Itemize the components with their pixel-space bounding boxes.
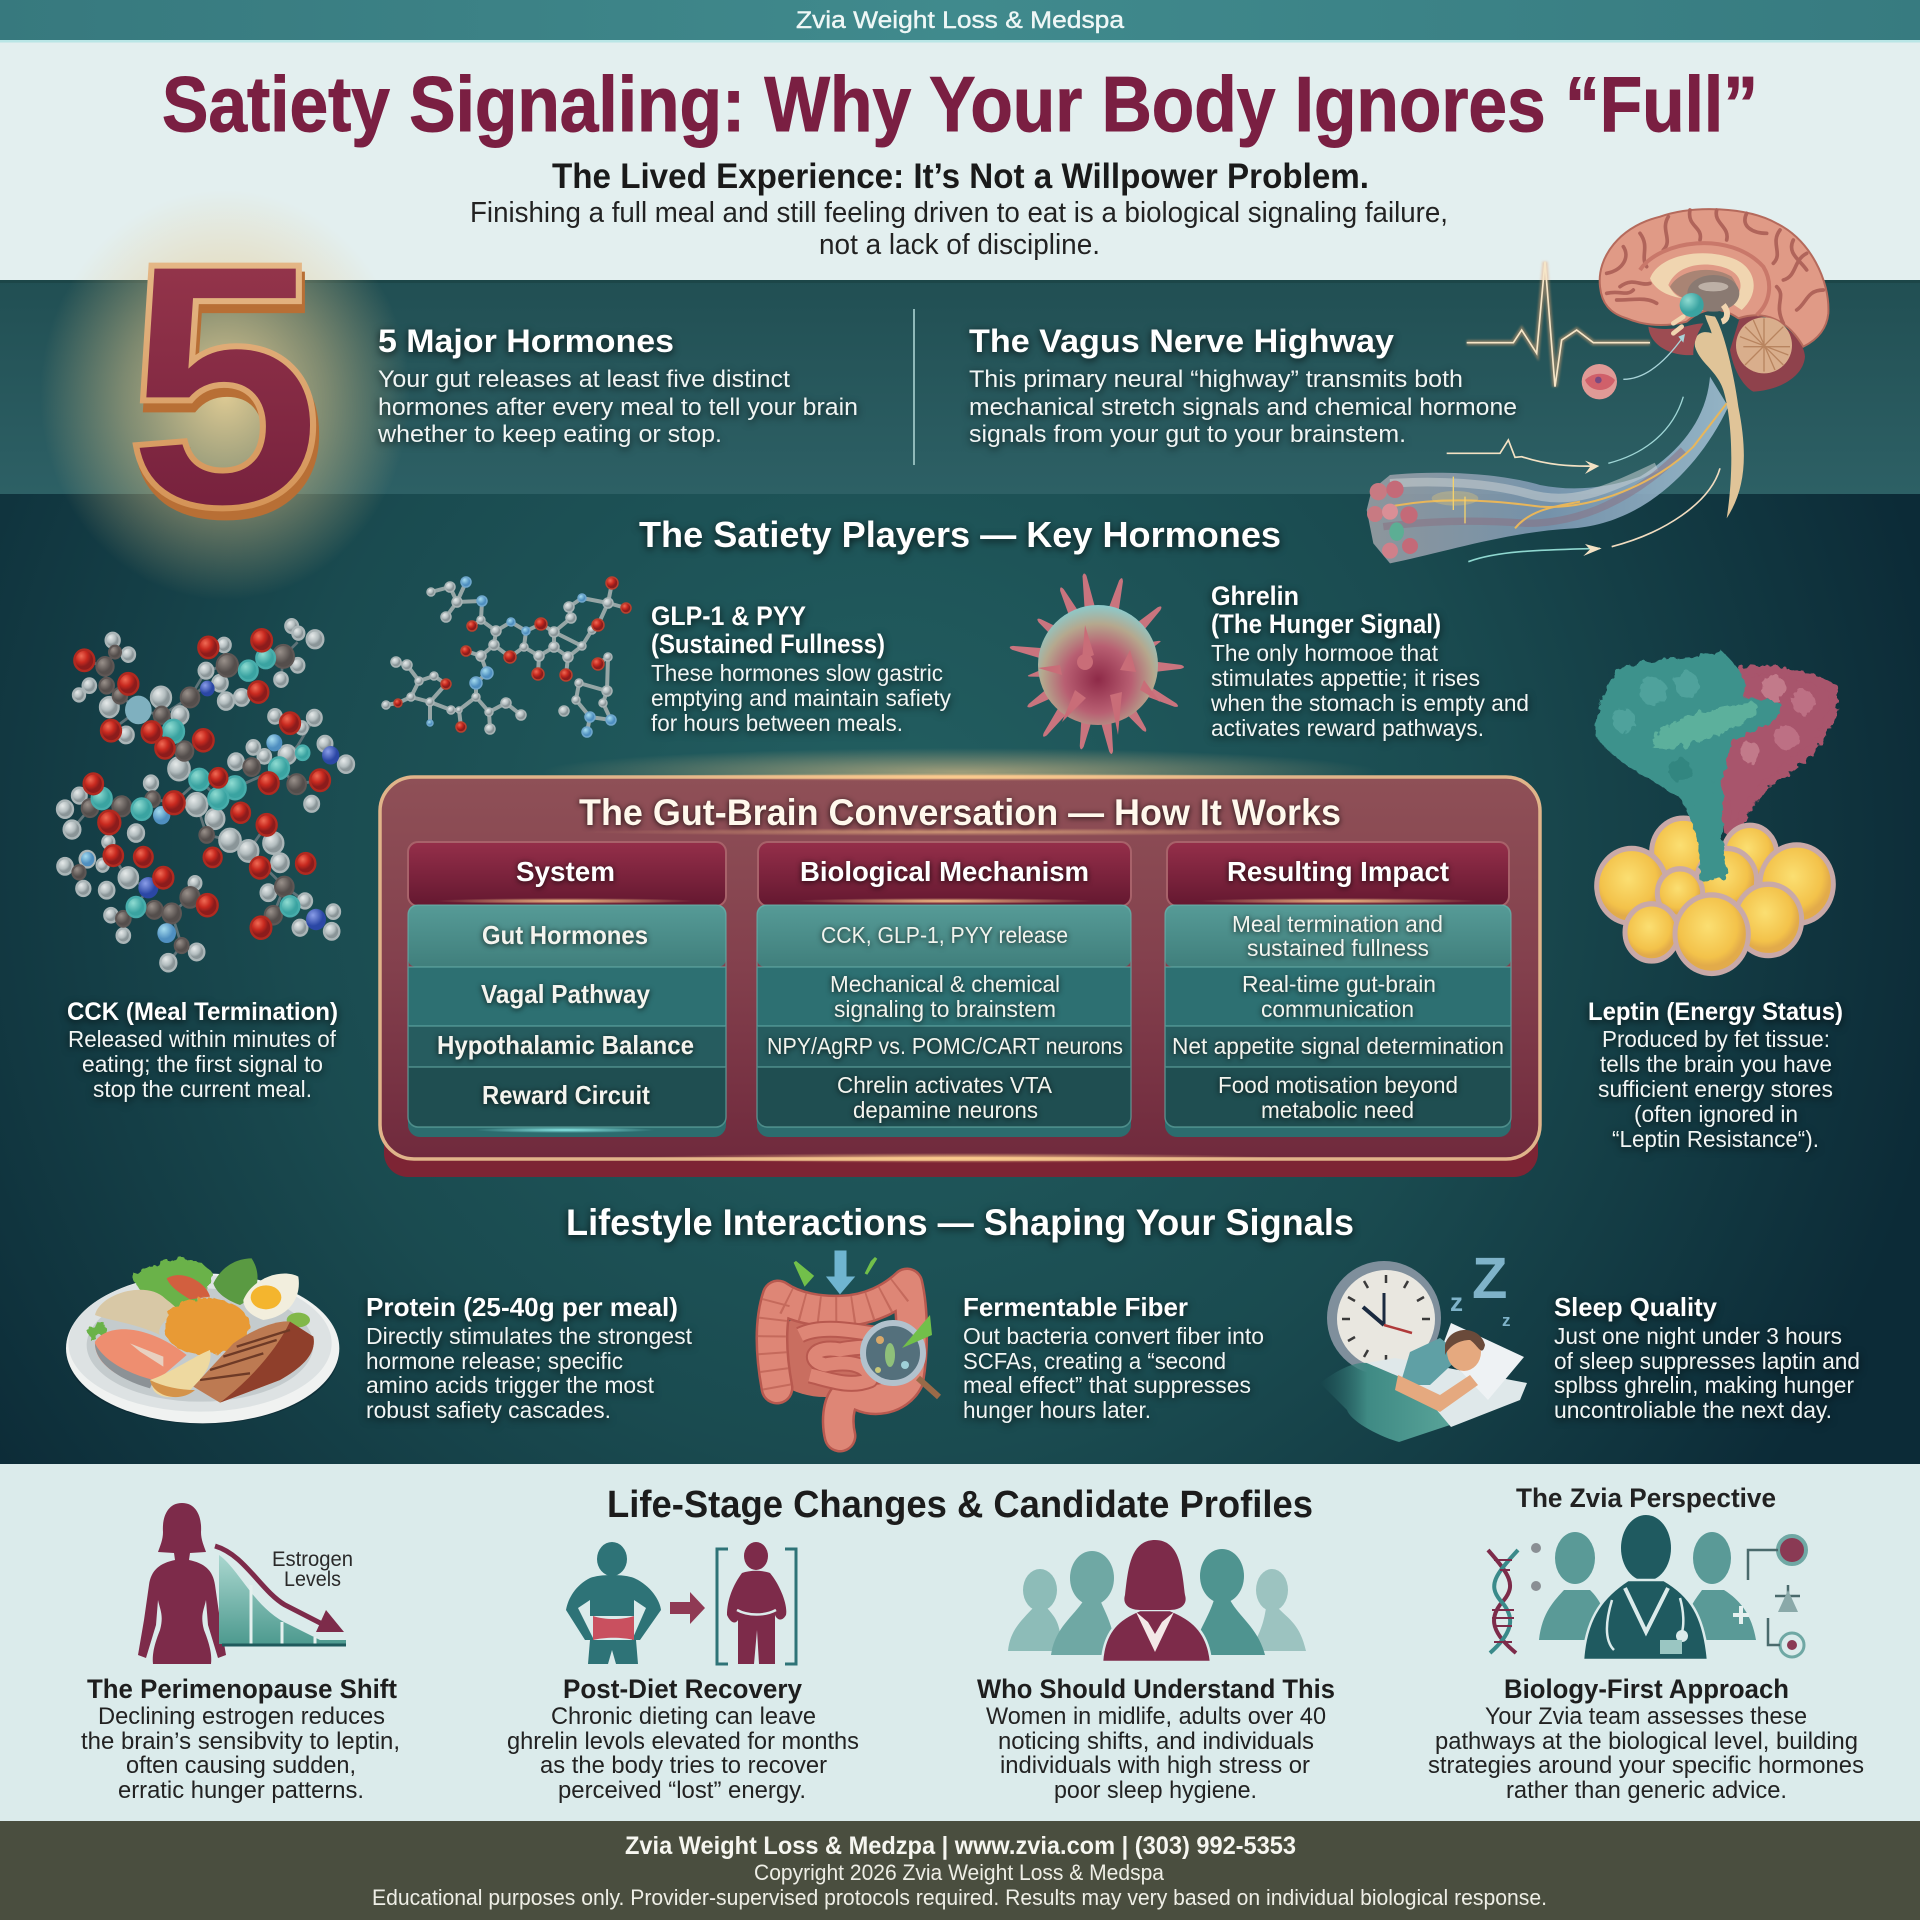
text: CCK (67, 998, 338, 1102)
pink protein lobe (1720, 670, 1834, 831)
table column: resulting impact: Meal termination and (1232, 911, 1443, 937)
text: who should understand this: individuals with high stress or (1000, 1752, 1310, 1779)
subtitle block: not a lack of discipline. (819, 229, 1100, 261)
text: leptin: tells the brain you have (1600, 1051, 1832, 1077)
text: GLP-1 and PYY: for hours between meals. (651, 710, 903, 736)
inner brain (1650, 253, 1754, 310)
text: leptin: Produced by fet tissue: (1602, 1026, 1830, 1052)
table column: biological mechanism: Chrelin activates VTA (837, 1072, 1052, 1098)
pasta roll (150, 1350, 211, 1397)
heading: the satiety players: The Satiety Players — Key Hormones (639, 514, 1281, 555)
table column: system: Gut Hormones (482, 920, 648, 950)
cerebellum back (1730, 316, 1805, 392)
illustration: perimenopause figure and estrogen chart: Estrogen (272, 1548, 353, 1571)
text: CCK: CCK (Meal Termination) (67, 998, 338, 1026)
stat: vagus nerve highway: mechanical stretch signals and chemical hormone (969, 394, 1517, 421)
table column: biological mechanism: CCK, GLP-1, PYY release (821, 922, 1068, 948)
table column: biological mechanism (757, 842, 1131, 1137)
text: perimenopause shift: Declining estrogen reduces (98, 1703, 385, 1730)
illustration: GLP-1 molecule (382, 577, 631, 737)
text: Ghrelin: stimulates appettie; it rises (1211, 665, 1480, 691)
text: sleep quality (1554, 1292, 1860, 1423)
text: leptin: sufficient energy stores (1598, 1076, 1833, 1102)
illustration: protein plate (66, 1258, 339, 1424)
text: perimenopause shift: The Perimenopause Shift (87, 1674, 397, 1704)
illustration: perimenopause figure and estrogen chart (138, 1503, 353, 1664)
teal protein lobe (1600, 656, 1777, 877)
text: who should understand this: Women in midlife, adults over 40 (986, 1703, 1326, 1730)
illustration: group of silhouettes (1008, 1540, 1306, 1662)
illustration: ghrelin virus-like particle (1009, 573, 1184, 755)
illustration: post-diet recovery figures (566, 1542, 796, 1664)
text: perimenopause shift: often causing sudden, (126, 1752, 356, 1779)
illustration: clock and sleeping person (1320, 1246, 1527, 1442)
table column: system: Vagal Pathway (481, 979, 650, 1009)
footer: Educational purposes only. Provider-supervised protocols required. Results may very based on individual biological response. (372, 1885, 1547, 1910)
stat: 5 major hormones: 5 Major Hormones (378, 323, 674, 359)
text: leptin: (often ignored in (1634, 1101, 1798, 1127)
text: protein: hormone release; specific (366, 1348, 623, 1374)
heading: the zvia perspective: The Zvia Perspective (1516, 1483, 1776, 1513)
text: sleep quality: of sleep suppresses laptin and (1554, 1348, 1860, 1374)
footer: Zvia Weight Loss & Medzpa | www.zvia.com | (303) 992-5353 (625, 1832, 1296, 1860)
table column: resulting impact: Real-time gut-brain (1242, 971, 1436, 997)
text: biology-first approach: pathways at the biological level, building (1435, 1728, 1858, 1755)
text: fermentable fiber: Out bacteria convert fiber into (963, 1323, 1264, 1349)
text: sleep quality: splbss ghrelin, making hunger (1554, 1372, 1854, 1398)
text: leptin: Leptin (Energy Status) (1588, 998, 1843, 1026)
text: protein: robust safiety cascades. (366, 1397, 611, 1423)
text: who should understand this (977, 1674, 1335, 1804)
stat: 5 major hormones: Your gut releases at least five distinct (378, 366, 790, 393)
text: protein: Protein (25-40g per meal) (366, 1292, 678, 1322)
stat: 5 major hormones (377, 323, 858, 448)
text: fermentable fiber: Fermentable Fiber (963, 1292, 1188, 1322)
text: leptin: “Leptin Resistance“). (1612, 1126, 1819, 1152)
stat: vagus nerve highway: This primary neural “highway” transmits both (969, 366, 1463, 393)
text: post-diet recovery: Post-Diet Recovery (563, 1674, 802, 1704)
text: Ghrelin: activates reward pathways. (1211, 715, 1484, 741)
table column: biological mechanism: depamine neurons (853, 1097, 1038, 1123)
table column: resulting impact: sustained fullness (1247, 935, 1429, 961)
text: post-diet recovery: ghrelin levols elevated for months (507, 1728, 859, 1755)
text: sleep quality: uncontroliable the next day. (1554, 1397, 1832, 1423)
heading: life-stage changes: Life-Stage Changes & Candidate Profiles (607, 1484, 1313, 1526)
text: perimenopause shift (81, 1674, 400, 1804)
text: perimenopause shift: the brain’s sensibvity to leptin, (81, 1728, 400, 1755)
text: biology-first approach (1428, 1674, 1864, 1804)
text: fermentable fiber (963, 1292, 1264, 1423)
big number 5 (40, 190, 410, 600)
salmon (95, 1329, 187, 1387)
text: CCK: eating; the first signal to (82, 1051, 323, 1077)
spinal stem (1695, 315, 1744, 518)
table column: resulting impact: Food motisation beyond (1218, 1072, 1458, 1098)
table column: resulting impact: Resulting Impact (1227, 856, 1449, 887)
lettuce (87, 1259, 211, 1340)
table column: resulting impact: metabolic need (1261, 1097, 1414, 1123)
text: post-diet recovery: as the body tries to recover (540, 1752, 827, 1779)
table column: resulting impact: Net appetite signal determination (1172, 1033, 1504, 1059)
text: Ghrelin: (The Hunger Signal) (1211, 609, 1441, 639)
subtitle block: The Lived Experience: It’s Not a Willpower Problem. (552, 157, 1369, 196)
corn-like portion (163, 1298, 250, 1355)
table column: resulting impact: communication (1261, 996, 1414, 1022)
illustration: leptin protein and fat cells (1597, 656, 1834, 973)
text: Ghrelin (1210, 581, 1529, 741)
illustration: perimenopause figure and estrogen chart: Levels (284, 1568, 341, 1591)
text: sleep quality: Just one night under 3 hours (1554, 1323, 1842, 1349)
text: sleep quality: Sleep Quality (1554, 1292, 1718, 1322)
text: fermentable fiber: meal effect” that suppresses (963, 1372, 1251, 1398)
text: who should understand this: poor sleep hygiene. (1054, 1777, 1257, 1804)
footer: Copyright 2026 Zvia Weight Loss & Medspa (754, 1860, 1165, 1885)
text: biology-first approach: Your Zvia team assesses these (1485, 1703, 1807, 1730)
text: protein (366, 1292, 692, 1423)
text: leptin (1588, 998, 1843, 1152)
text: Ghrelin: The only hormooe that (1211, 640, 1438, 666)
subtitle block: Finishing a full meal and still feeling driven to eat is a biological signaling failure, (470, 197, 1448, 229)
text: biology-first approach: rather than generic advice. (1506, 1777, 1787, 1804)
illustration: brain and vagus nerve (1367, 209, 1828, 563)
text: protein: Directly stimulates the strongest (366, 1323, 692, 1349)
stat: 5 major hormones: hormones after every meal to tell your brain (378, 394, 858, 421)
egg (243, 1274, 299, 1320)
text: biology-first approach: strategies around your specific hormones (1428, 1752, 1864, 1779)
title: Satiety Signaling: Why Your Body Ignores “Full” (162, 60, 1758, 148)
illustration: clock and sleeping person: Z (1472, 1246, 1507, 1311)
cerebellum arbor (1736, 317, 1792, 373)
stat: vagus nerve highway: The Vagus Nerve Highway (969, 323, 1394, 359)
text: GLP-1 and PYY: These hormones slow gastric (651, 660, 943, 686)
fat cells (1597, 818, 1833, 973)
illustration: clock and sleeping person: z (1502, 1311, 1510, 1330)
text: Ghrelin: Ghrelin (1211, 581, 1299, 611)
text: post-diet recovery (507, 1674, 859, 1804)
rice (95, 1290, 177, 1335)
table column: biological mechanism: Mechanical & chemical (830, 971, 1060, 997)
text: post-diet recovery: perceived “lost” energy. (558, 1777, 806, 1804)
text: who should understand this: noticing shifts, and individuals (998, 1728, 1314, 1755)
steak (193, 1321, 314, 1403)
text: GLP-1 and PYY: emptying and maintain safiety (651, 685, 951, 711)
cerebrum (1600, 209, 1828, 347)
text: CCK: stop the current meal. (93, 1076, 312, 1102)
heading: lifestyle interactions: Lifestyle Interactions — Shaping Your Signals (566, 1202, 1354, 1243)
panel: gut-brain conversation (380, 748, 1540, 1177)
text: fermentable fiber: hunger hours later. (963, 1397, 1151, 1423)
illustration: care team and DNA (1488, 1515, 1806, 1660)
table column: resulting impact (1165, 842, 1511, 1137)
big number 5: 5 (128, 199, 326, 588)
text: fermentable fiber: SCFAs, creating a “second (963, 1348, 1226, 1374)
stat: 5 major hormones: whether to keep eating or stop. (377, 421, 722, 448)
table column: biological mechanism: Biological Mechanism (800, 856, 1089, 887)
table column: system (408, 842, 726, 1137)
text: who should understand this: Who Should Understand This (977, 1674, 1335, 1704)
panel heading: The Gut-Brain Conversation — How It Works (579, 792, 1341, 833)
text: GLP-1 and PYY: (Sustained Fullness) (651, 629, 885, 659)
table column: system: System (516, 856, 615, 887)
top bar: Zvia Weight Loss & Medspa (796, 7, 1125, 34)
text: post-diet recovery: Chronic dieting can leave (551, 1703, 816, 1730)
big number 5: 5 (125, 190, 323, 579)
text: CCK: Released within minutes of (68, 1026, 336, 1052)
nerve bundle (1367, 377, 1728, 563)
illustration: CCK molecule (57, 619, 354, 971)
table column: biological mechanism: signaling to brainstem (834, 996, 1056, 1022)
text: Ghrelin: when the stomach is empty and (1210, 690, 1529, 716)
subtitle block (470, 157, 1448, 261)
text: biology-first approach: Biology-First Approach (1504, 1674, 1789, 1704)
signal lines (1467, 262, 1650, 387)
table column: biological mechanism: NPY/AgRP vs. POMC/CART neurons (767, 1033, 1123, 1059)
footer (0, 1821, 1920, 1920)
stat: vagus nerve highway: signals from your gut to your brainstem. (969, 421, 1406, 448)
stat: vagus nerve highway (969, 323, 1517, 448)
illustration: intestines with magnifier (765, 1252, 939, 1436)
table column: system: Hypothalamic Balance (437, 1030, 694, 1060)
illustration: clock and sleeping person: z (1450, 1287, 1463, 1317)
top bar (0, 0, 1920, 42)
text: GLP-1 and PYY: GLP-1 & PYY (651, 601, 806, 631)
text: protein: amino acids trigger the most (366, 1372, 654, 1398)
text: perimenopause shift: erratic hunger patterns. (118, 1777, 364, 1804)
text: GLP-1 and PYY (651, 601, 951, 736)
table column: system: Reward Circuit (482, 1080, 650, 1110)
